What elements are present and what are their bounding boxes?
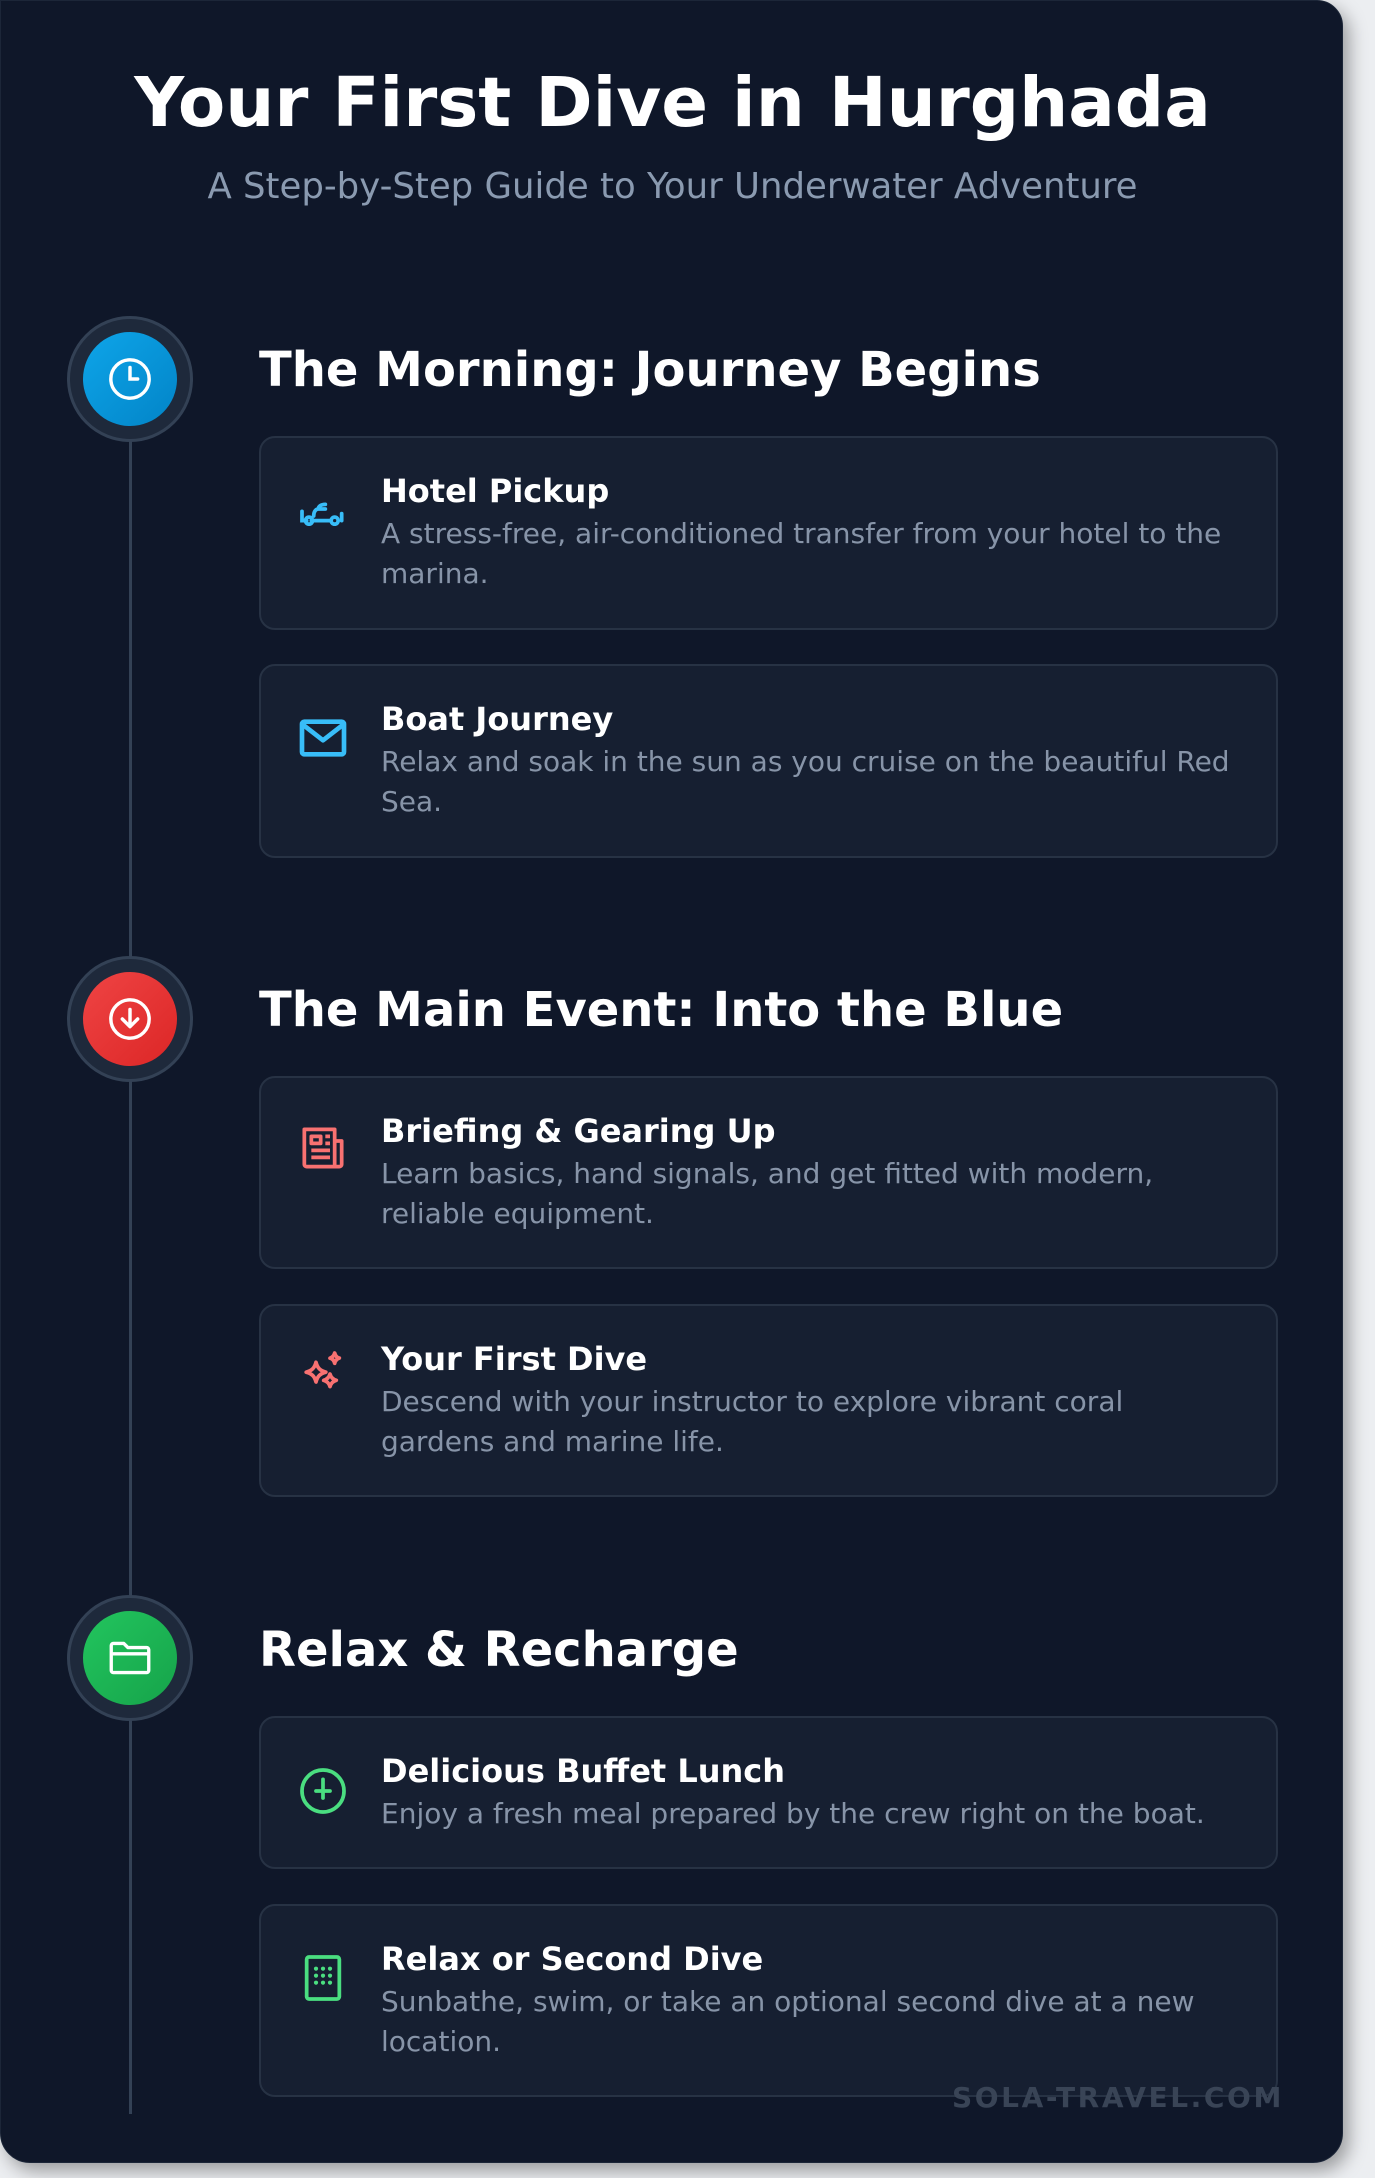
timeline node: down arrow [67, 956, 193, 1082]
card title: Your First Dive [381, 1340, 647, 1378]
card: boat journey [259, 664, 1278, 858]
icon: plate [300, 1768, 346, 1814]
subtitle: A Step-by-Step Guide to Your Underwater Adventure [207, 166, 1138, 207]
timeline node: folder [67, 1595, 193, 1721]
icon: newspaper [302, 1128, 344, 1168]
card title: Hotel Pickup [381, 472, 609, 510]
icon: envelope [300, 719, 346, 757]
card title: Delicious Buffet Lunch [381, 1752, 785, 1790]
card text: Learn basics, hand signals, and get fitted with modern, reliable equipment. [381, 1157, 1153, 1230]
card: lunch [259, 1716, 1278, 1869]
title: Your First Dive in Hurghada [134, 63, 1211, 143]
card text: Descend with your instructor to explore vibrant coral gardens and marine life. [381, 1385, 1123, 1458]
icon: sparkles [304, 1351, 342, 1388]
timeline line [129, 379, 132, 2114]
card: briefing [259, 1076, 1278, 1269]
card: first dive [259, 1304, 1278, 1497]
icon: car [300, 502, 344, 526]
section heading: morning: The Morning: Journey Begins [259, 342, 1041, 398]
section heading: relax: Relax & Recharge [259, 1622, 739, 1678]
card title: Boat Journey [381, 700, 613, 738]
icon: building [304, 1955, 342, 2001]
card: relax or second dive [259, 1904, 1278, 2097]
watermark: SOLA-TRAVEL.COM [952, 2081, 1284, 2114]
section heading: main event: The Main Event: Into the Blue [259, 982, 1063, 1038]
card title: Relax or Second Dive [381, 1940, 763, 1978]
card: hotel pickup [259, 436, 1278, 630]
card text: Sunbathe, swim, or take an optional second dive at a new location. [381, 1985, 1194, 2058]
card title: Briefing & Gearing Up [381, 1112, 775, 1150]
card text: A stress-free, air-conditioned transfer from your hotel to the marina. [381, 517, 1221, 590]
card text: Enjoy a fresh meal prepared by the crew right on the boat. [381, 1797, 1205, 1830]
timeline node: clock [67, 316, 193, 442]
card text: Relax and soak in the sun as you cruise on the beautiful Red Sea. [381, 745, 1230, 818]
